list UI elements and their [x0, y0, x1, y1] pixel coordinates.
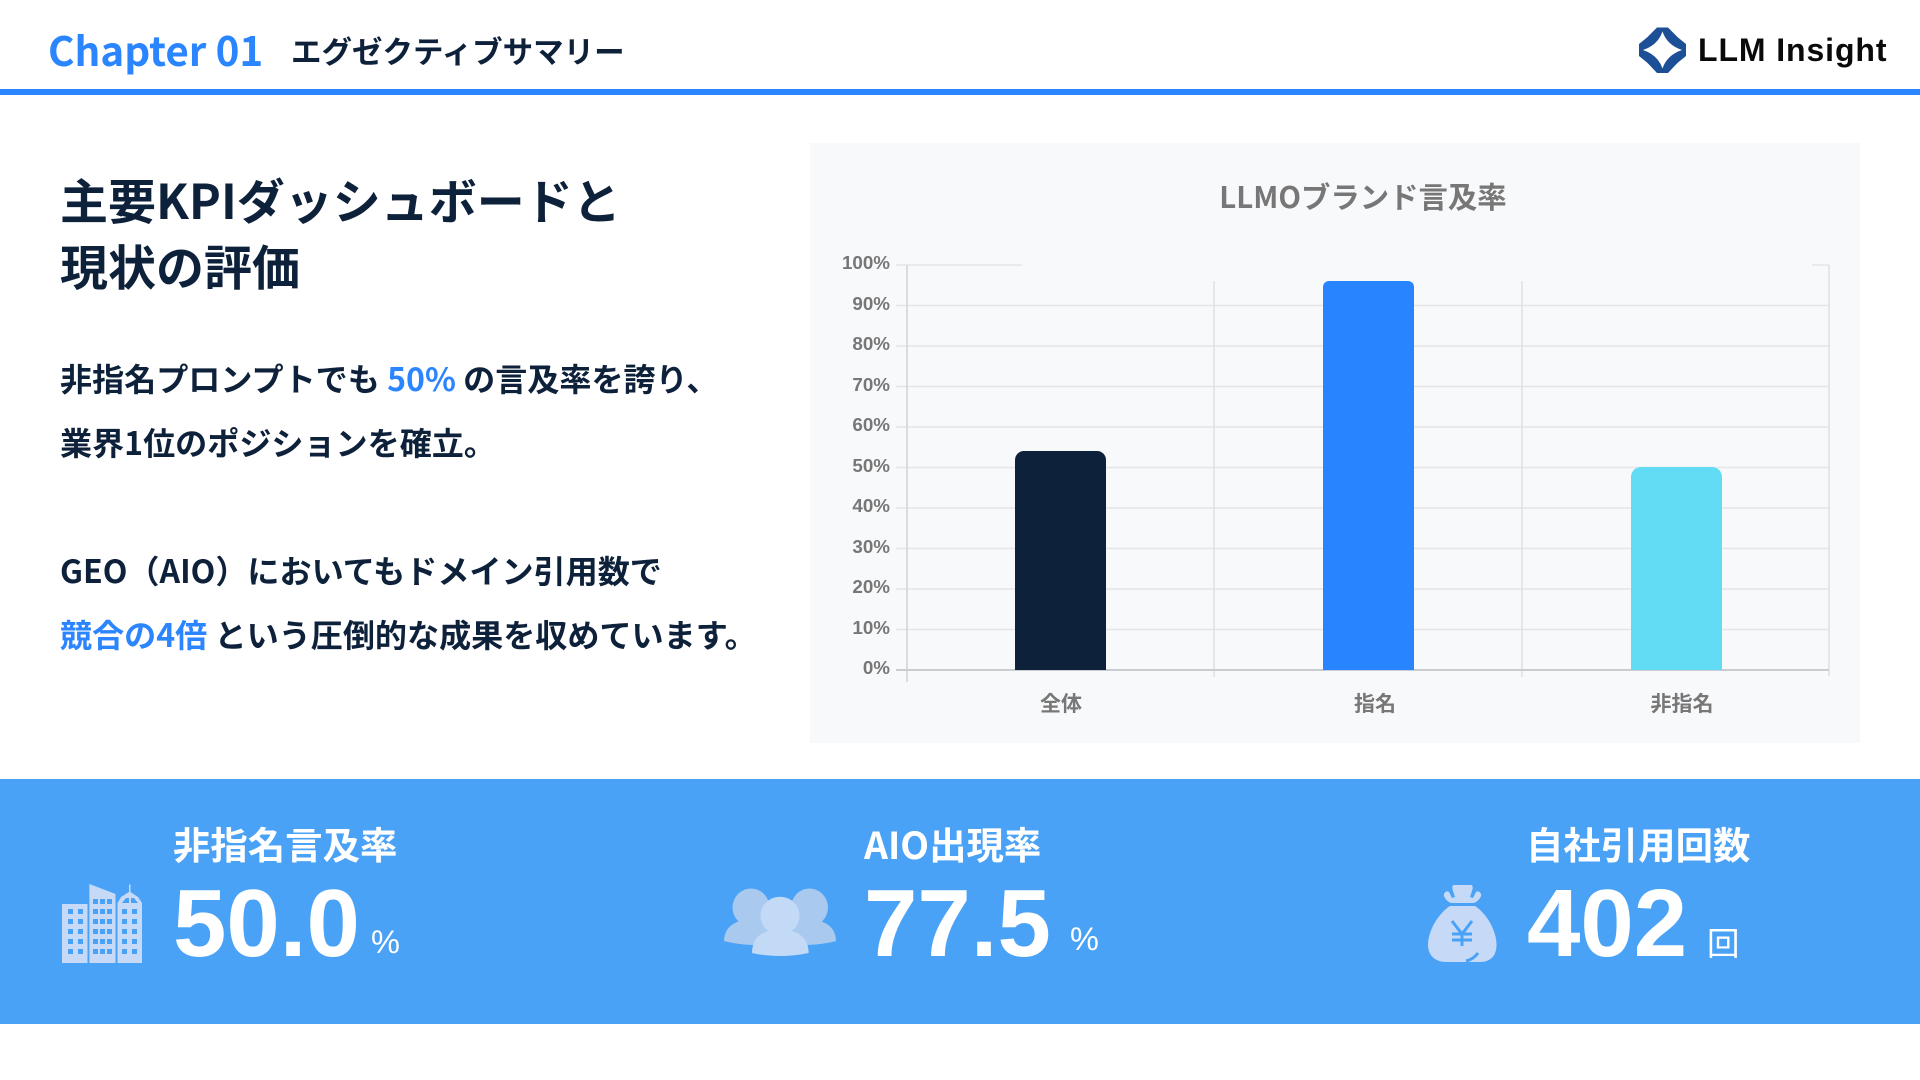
body text: paragraph 1: 非指名プロンプトでも 50% の言及率を誇り、	[60, 355, 718, 401]
y axis labels: 100%	[842, 252, 890, 273]
bar: 全体 54%	[1015, 451, 1106, 670]
y axis labels: 20%	[852, 576, 890, 597]
x axis labels: 非指名	[1650, 688, 1714, 718]
label: 自社引用回数	[1526, 816, 1750, 870]
body text: paragraph 1: 業界1位のポジションを確立。	[60, 419, 496, 465]
icon: people	[724, 888, 836, 956]
body text: paragraph 1	[60, 355, 718, 465]
icon: logo diamond	[1639, 28, 1686, 73]
chapter subtitle: エグゼクティブサマリー	[291, 28, 625, 72]
label: AIO出現率	[864, 816, 1041, 870]
label: 非指名言及率	[173, 816, 397, 870]
body text: paragraph 2	[60, 547, 757, 657]
main heading: 現状の評価	[60, 229, 300, 299]
y axis labels	[842, 252, 890, 678]
panel: bar chart	[842, 175, 1830, 718]
bar: 非指名 50%	[1631, 467, 1722, 670]
chapter label: Chapter 01	[48, 19, 263, 78]
bar: 指名 96%	[1323, 281, 1414, 670]
value: 77.5	[864, 870, 1051, 977]
body text: paragraph 2: GEO（AIO）においてもドメイン引用数で	[60, 547, 662, 593]
y axis labels: 60%	[852, 414, 890, 435]
x axis labels: 指名	[1354, 688, 1396, 718]
icon: money bag	[1428, 885, 1496, 962]
unit: 回	[1707, 926, 1740, 962]
logo wordmark: LLM Insight	[1698, 32, 1887, 68]
value: 50.0	[173, 870, 360, 977]
y axis labels: 30%	[852, 536, 890, 557]
logo: LLM Insight	[1639, 28, 1887, 73]
header rule	[0, 89, 1920, 95]
y axis labels: 0%	[863, 657, 890, 678]
y axis labels: 50%	[852, 455, 890, 476]
x axis labels	[1040, 688, 1714, 718]
panel: KPI band	[0, 779, 1920, 1024]
KPI 3: 自社引用回数	[1428, 816, 1750, 977]
body text: paragraph 2: 競合の4倍 という圧倒的な成果を収めています。	[60, 611, 757, 657]
chart title: LLMOブランド言及率	[1219, 175, 1507, 217]
KPI 2: AIO出現率	[724, 816, 1099, 977]
unit: %	[371, 924, 400, 960]
KPI 1: 非指名言及率	[62, 816, 400, 977]
value: 402	[1527, 870, 1687, 977]
unit: %	[1070, 921, 1099, 957]
x axis labels: 全体	[1040, 688, 1082, 718]
main heading: 主要KPIダッシュボードと	[60, 163, 621, 233]
y axis labels: 90%	[852, 293, 890, 314]
y axis labels: 40%	[852, 495, 890, 516]
y axis labels: 70%	[852, 374, 890, 395]
y axis labels: 10%	[852, 617, 890, 638]
main heading	[60, 163, 621, 299]
icon: buildings	[62, 884, 142, 963]
y axis labels: 80%	[852, 333, 890, 354]
